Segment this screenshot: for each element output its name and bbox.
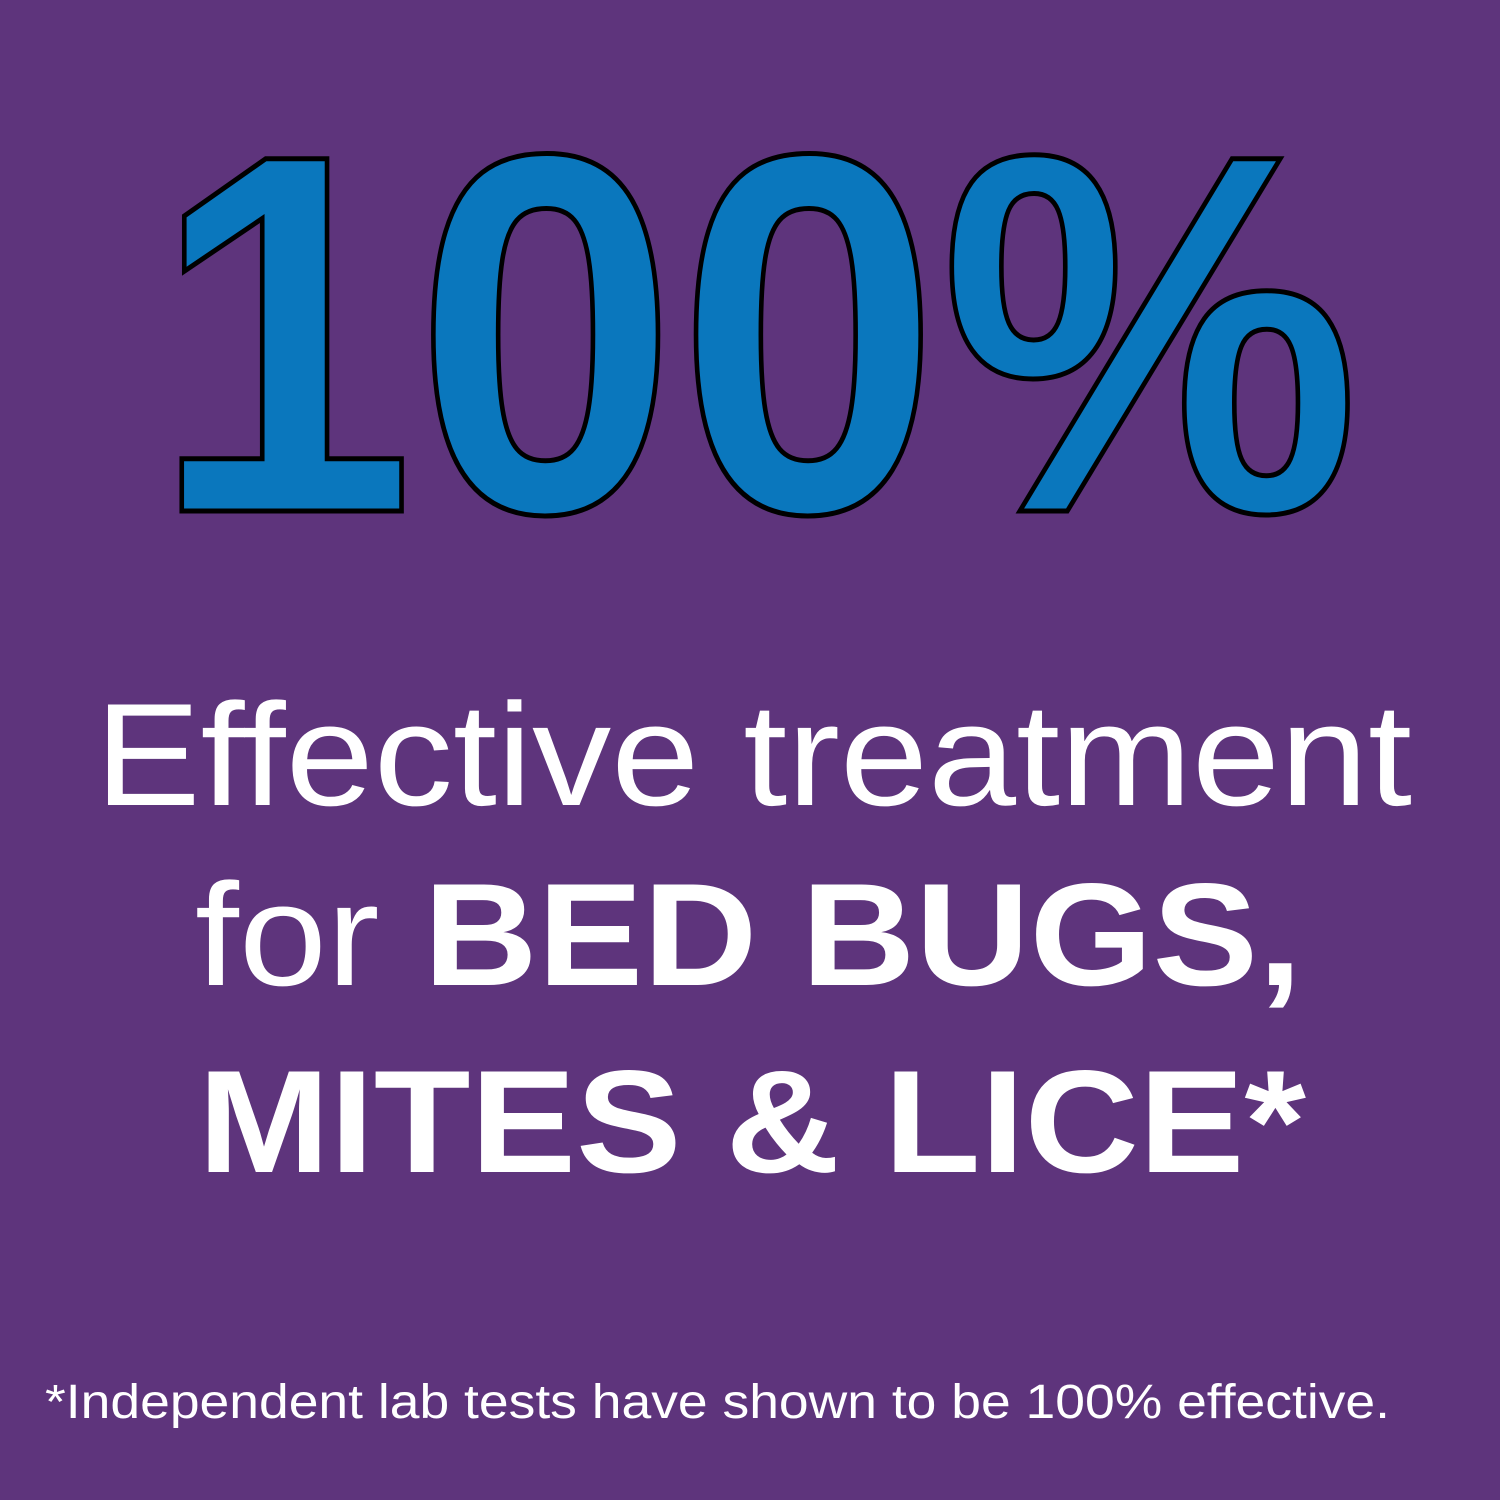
line: MITES & LICE*: MITES & LICE* [198, 1040, 1306, 1203]
footnote: *Independent lab tests have shown to be 100% effective. [45, 1376, 1390, 1429]
line: Effective treatment: Effective treatment [95, 673, 1412, 836]
line: for BED BUGS,: for BED BUGS, [195, 853, 1302, 1016]
subheading text block [95, 673, 1412, 1203]
headline: 100%: 100% [152, 47, 1360, 620]
